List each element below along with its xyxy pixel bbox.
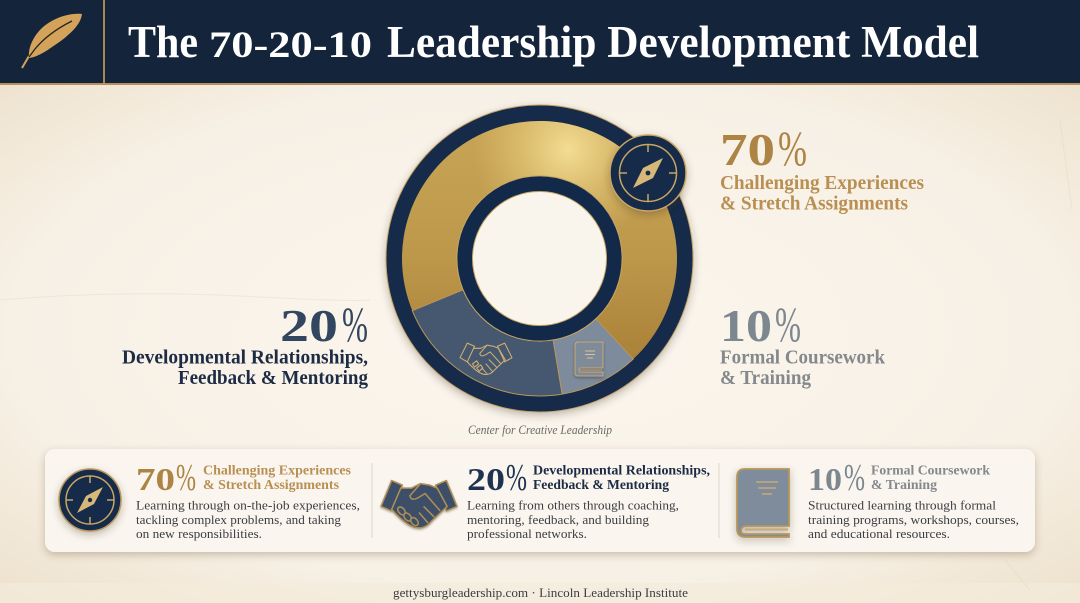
center hole — [472, 192, 606, 326]
panel: summary card — [45, 449, 1035, 552]
label: Formal Coursework — [871, 464, 990, 478]
icon: feather — [22, 14, 82, 68]
stat: 20%: % — [342, 296, 368, 352]
description — [136, 498, 360, 541]
icon: handshake — [381, 481, 457, 528]
segment: 20% slate — [412, 290, 562, 396]
title: The — [128, 17, 198, 67]
stat: 20 — [467, 461, 505, 497]
label: & Training — [871, 478, 937, 493]
stat: % — [176, 457, 196, 499]
label: formal coursework — [720, 346, 886, 389]
title: 70-20-10 — [209, 25, 372, 66]
stat: 10%: % — [775, 296, 801, 352]
callout: 10% — [720, 296, 886, 389]
stat: 70 — [136, 461, 175, 497]
source credit: Center for Creative Leadership — [468, 423, 612, 437]
description: Structured learning through formal — [808, 498, 997, 512]
label — [533, 464, 710, 493]
label: formal coursework: Formal Coursework — [720, 346, 886, 368]
label: challenging experiences: & Stretch Assignments — [720, 192, 908, 214]
title: Leadership Development Model — [387, 17, 979, 67]
item: 70% summary — [59, 457, 360, 541]
description: tackling complex problems, and taking — [136, 513, 342, 527]
description: mentoring, feedback, and building — [467, 513, 650, 527]
label: developmental relationships: Feedback & Mentoring — [178, 367, 368, 389]
label: Feedback & Mentoring — [533, 478, 669, 493]
segment: 10% grey — [553, 319, 633, 394]
inner ring — [464, 184, 614, 334]
description: training programs, workshops, courses, — [808, 513, 1019, 527]
callout: 20% — [122, 296, 368, 389]
label: Challenging Experiences — [203, 464, 352, 478]
stat: % — [844, 457, 865, 499]
segment: 70% gold — [402, 121, 677, 359]
donut chart — [386, 105, 693, 412]
header banner — [0, 0, 1080, 85]
description: professional networks. — [467, 527, 587, 541]
stat: 20%: 20 — [280, 300, 338, 351]
icon: compass — [59, 469, 121, 531]
description: Learning from others through coaching, — [467, 498, 679, 512]
description: on new responsibilities. — [136, 527, 262, 541]
item: 20% summary — [381, 457, 710, 541]
label — [871, 464, 990, 493]
item: 10% summary — [737, 457, 1019, 541]
icon: compass medallion — [610, 135, 686, 211]
description: Learning through on-the-job experiences, — [136, 498, 360, 512]
stat: 10 — [808, 461, 842, 497]
icon: small book — [575, 342, 603, 376]
stat: 10%: 10 — [720, 300, 772, 351]
icon: handshake outline — [460, 343, 512, 374]
stat: % — [506, 457, 527, 499]
footer: gettysburgleadership.com · Lincoln Leadership Institute — [393, 586, 688, 600]
label: challenging experiences: Challenging Experiences — [720, 172, 924, 194]
icon: book — [737, 469, 789, 537]
label: & Stretch Assignments — [203, 478, 340, 493]
stat: 70%: 70 — [720, 124, 775, 175]
description: and educational resources. — [808, 527, 950, 541]
label — [203, 464, 352, 493]
label: developmental relationships — [122, 346, 368, 389]
callout: 70% — [720, 120, 924, 214]
label: challenging experiences — [720, 172, 924, 214]
label: formal coursework: & Training — [720, 367, 811, 389]
label: developmental relationships: Developmental Relationships, — [122, 346, 368, 368]
description — [808, 498, 1019, 541]
description — [467, 498, 679, 541]
stat: 70%: % — [778, 120, 807, 176]
label: Developmental Relationships, — [533, 464, 710, 478]
